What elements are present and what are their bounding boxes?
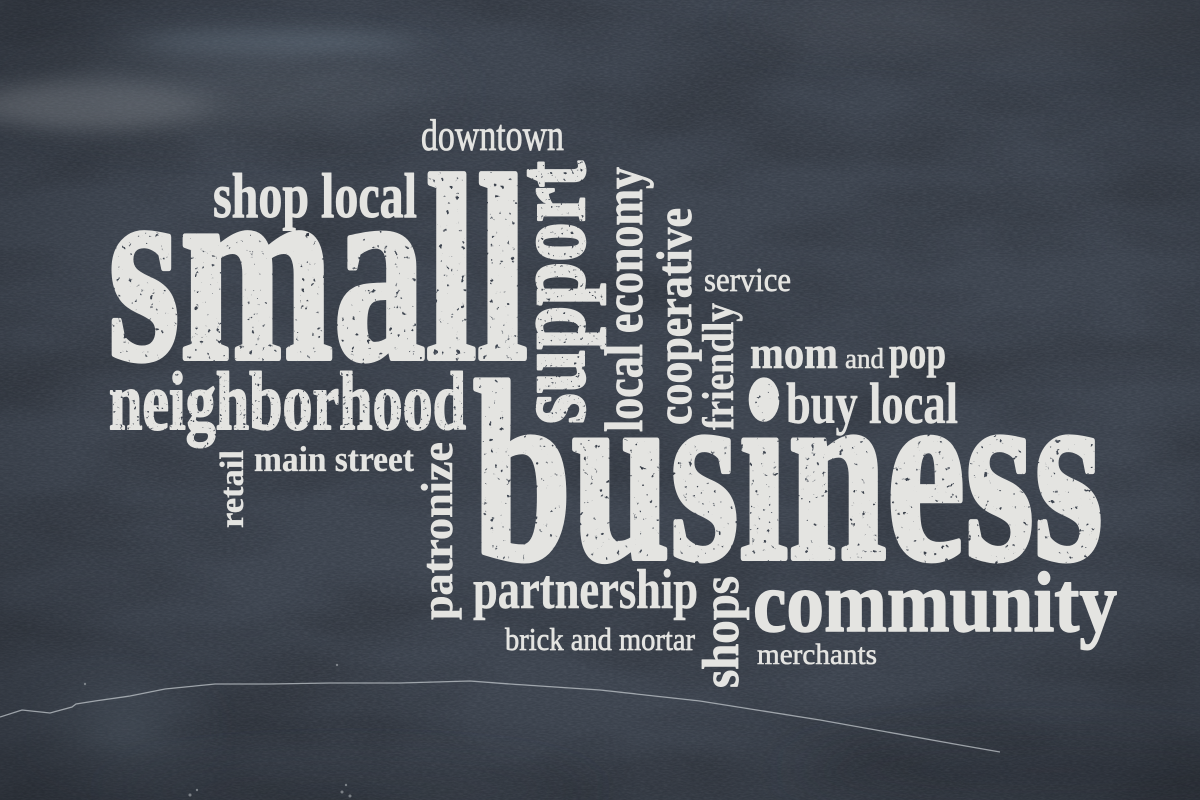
word: friendly: friendly: [694, 303, 743, 430]
word: pop: pop: [889, 327, 946, 378]
word: partnership: partnership: [473, 559, 698, 621]
word: merchants: merchants: [757, 638, 877, 671]
word cloud: [108, 111, 1117, 688]
word: cooperative: cooperative: [646, 208, 702, 425]
word: and: and: [845, 344, 884, 375]
word: retail: retail: [214, 450, 251, 528]
word: service: service: [704, 262, 791, 299]
word: local economy: local economy: [594, 167, 654, 432]
word: shops: shops: [693, 576, 750, 688]
word: community: community: [753, 554, 1117, 650]
word: brick and mortar: brick and mortar: [505, 621, 695, 657]
word: main street: main street: [254, 439, 414, 479]
word: neighborhood: neighborhood: [109, 355, 466, 447]
chalk speckles at bottom edge: [84, 664, 352, 798]
word: downtown: downtown: [421, 111, 564, 160]
word: shop local: shop local: [213, 160, 417, 231]
chalk scratch line: [0, 681, 1000, 752]
word: buy local: buy local: [786, 371, 958, 436]
word: small: small: [108, 123, 528, 416]
word: support: support: [495, 161, 606, 424]
word: patronize: patronize: [413, 442, 462, 620]
word: mom: mom: [750, 327, 838, 378]
